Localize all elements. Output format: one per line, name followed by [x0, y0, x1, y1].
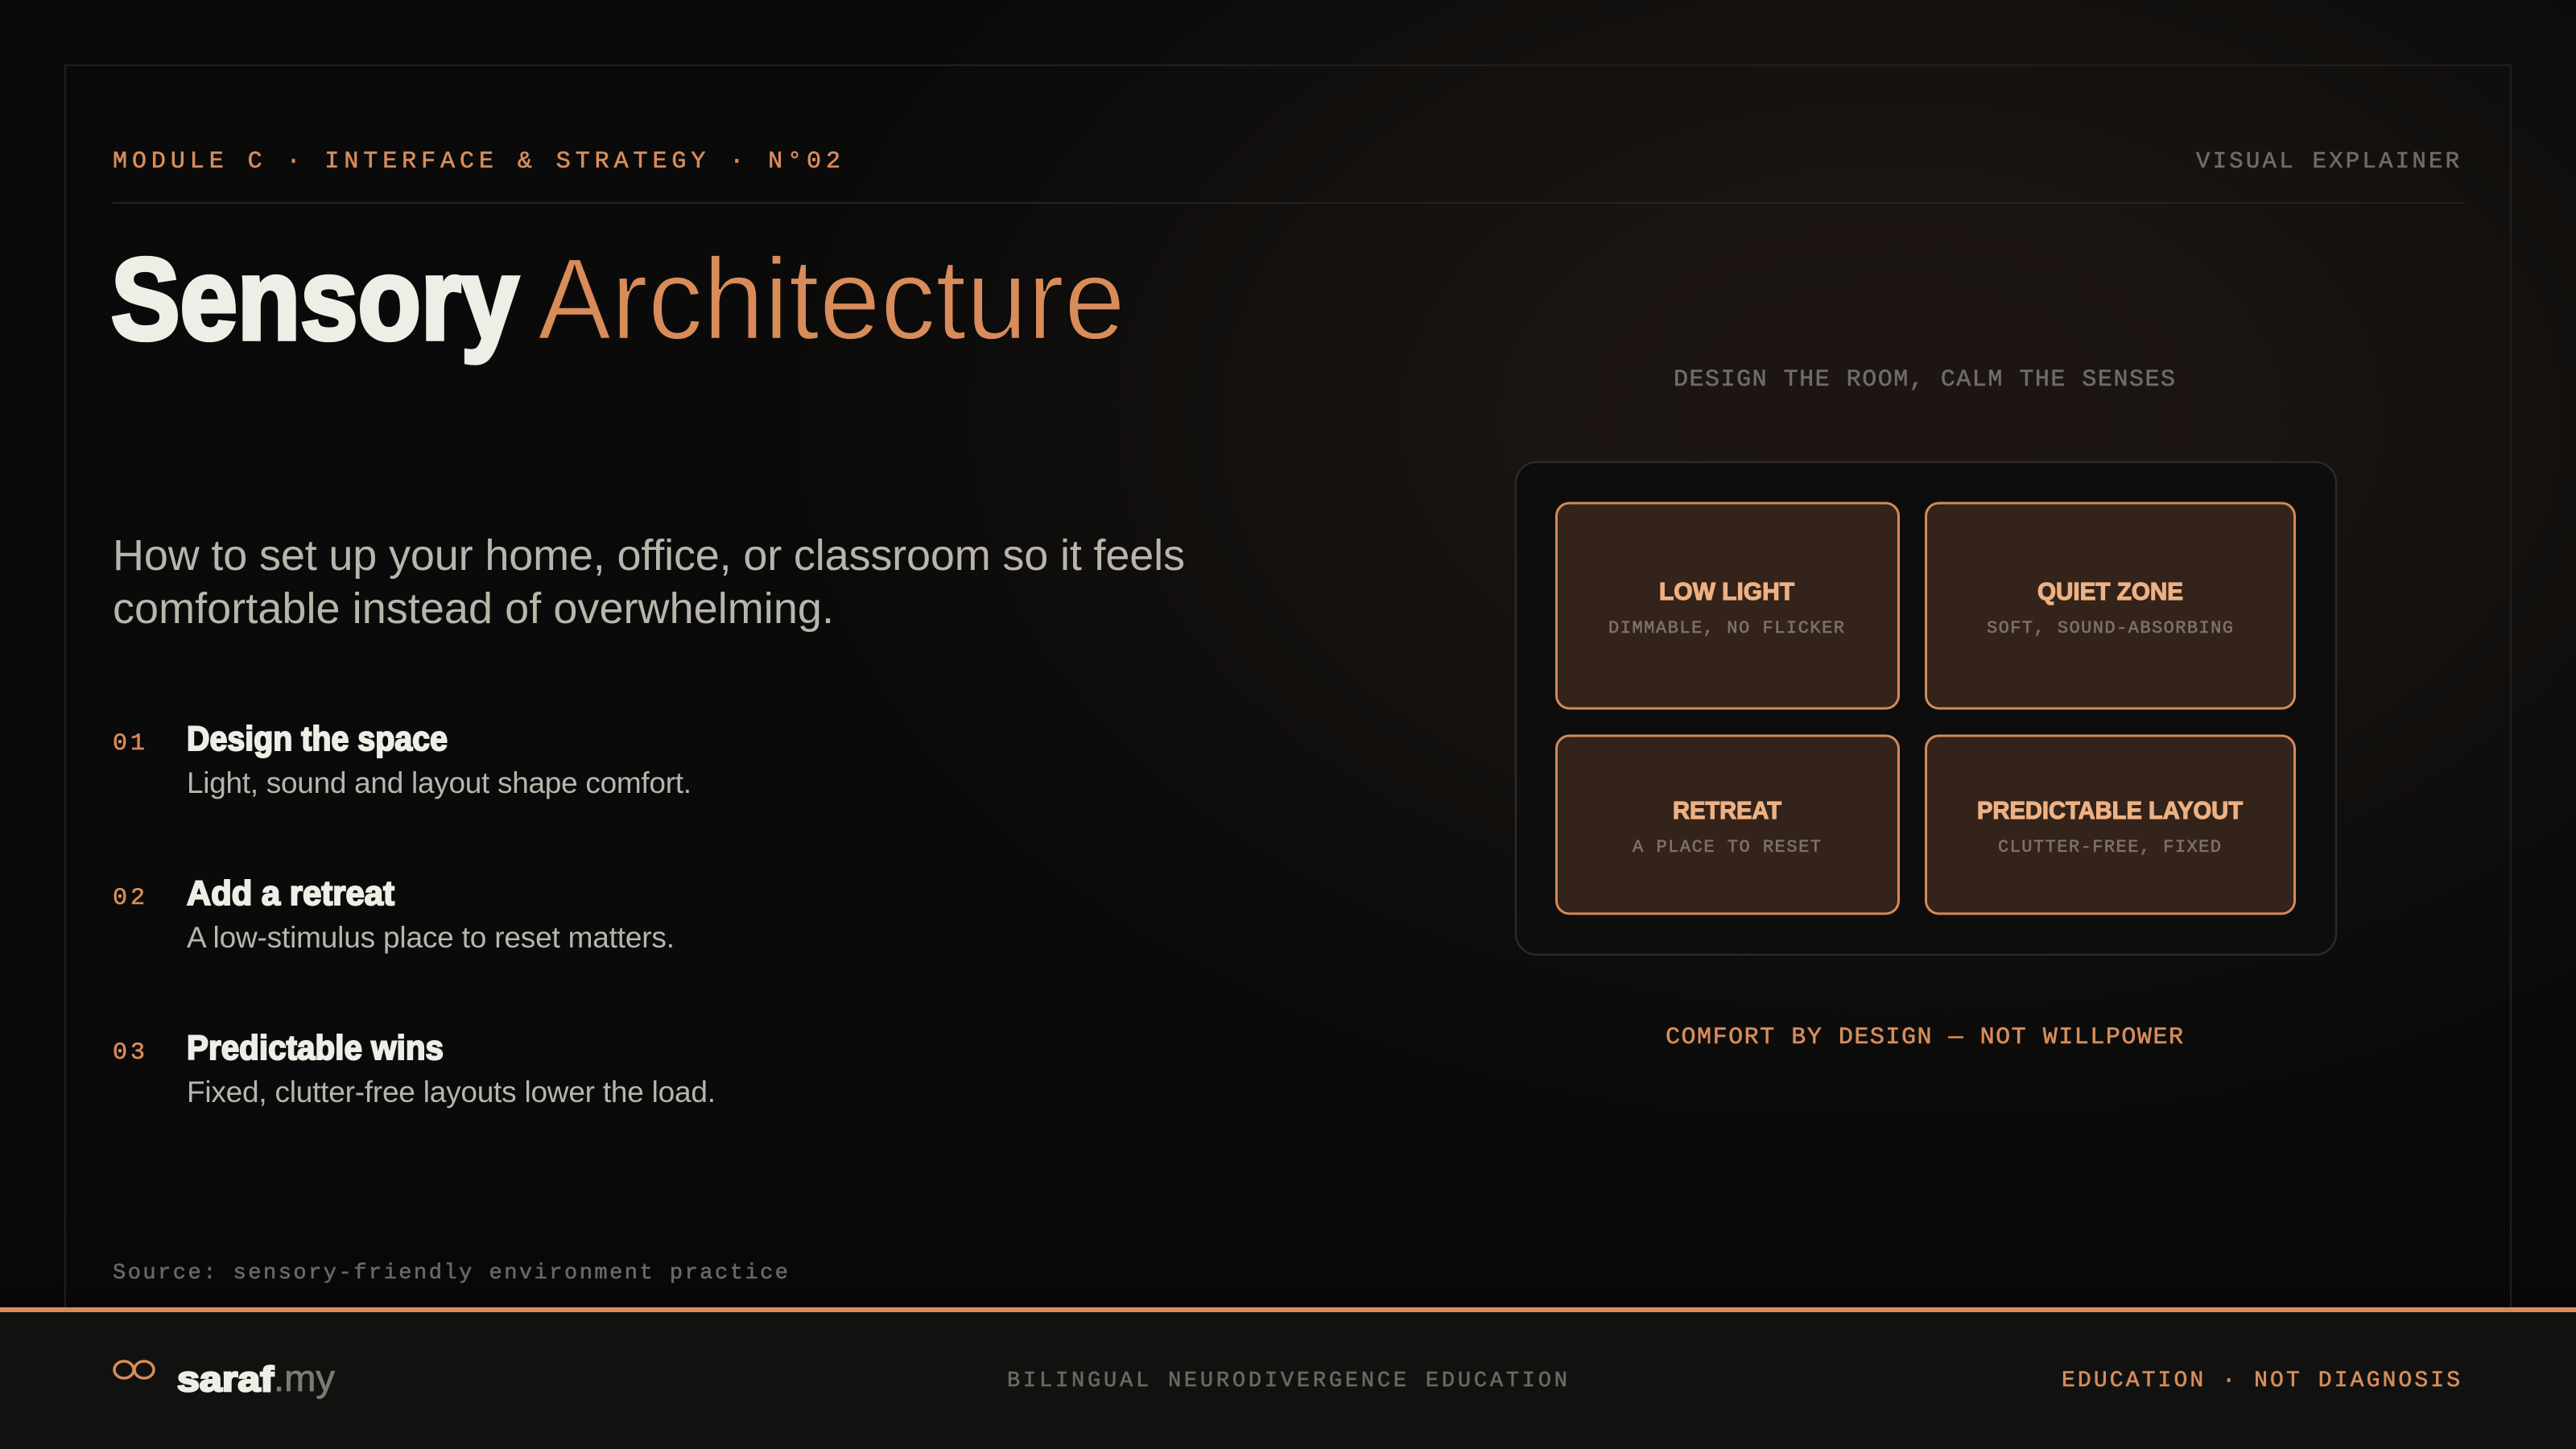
list item 02: A low-stimulus place to reset matters. [187, 921, 675, 954]
list item 03: Fixed, clutter-free layouts lower the load. [187, 1075, 716, 1108]
title: Architecture [538, 234, 1125, 364]
title [111, 234, 1125, 364]
header eyebrow: MODULE C · INTERFACE & STRATEGY · N°02 [113, 148, 840, 175]
subtitle [113, 531, 1185, 633]
card: low light [1557, 503, 1898, 708]
list item 03 [113, 1029, 716, 1108]
brand wordmark: .my [274, 1357, 335, 1399]
footer bar [0, 1307, 2576, 1449]
card: quiet zone: SOFT, SOUND-ABSORBING [1987, 618, 2233, 638]
card: retreat [1557, 736, 1898, 914]
header label: VISUAL EXPLAINER [2196, 148, 2459, 175]
diagram takeaway: COMFORT BY DESIGN — NOT WILLPOWER [1666, 1024, 2183, 1051]
brand wordmark: saraf [177, 1360, 274, 1399]
card: low light: LOW LIGHT [1659, 577, 1794, 605]
diagram caption: DESIGN THE ROOM, CALM THE SENSES [1674, 366, 2175, 394]
title: Sensory [111, 234, 518, 364]
source note: Source: sensory-friendly environment practice [113, 1261, 788, 1286]
list item 01 [113, 720, 691, 799]
card: predictable layout: PREDICTABLE LAYOUT [1977, 796, 2243, 824]
icon: infinity logo [114, 1361, 154, 1378]
subtitle: How to set up your home, office, or classroom so it feels [113, 531, 1185, 580]
list item 02: Add a retreat [187, 874, 394, 913]
card: predictable layout [1926, 736, 2294, 914]
footer right label: EDUCATION · NOT DIAGNOSIS [2062, 1368, 2460, 1393]
list item 03: 03 [113, 1039, 145, 1067]
list item 03: Predictable wins [187, 1029, 444, 1067]
list item 02 [113, 874, 675, 954]
panel: room diagram [1516, 462, 2336, 955]
list item 01: Design the space [187, 720, 448, 758]
footer center label: BILINGUAL NEURODIVERGENCE EDUCATION [1007, 1369, 1567, 1393]
brand wordmark [177, 1357, 335, 1399]
subtitle: comfortable instead of overwhelming. [113, 584, 834, 633]
list item 02: 02 [113, 885, 145, 912]
list item 01: Light, sound and layout shape comfort. [187, 766, 691, 799]
card: quiet zone [1926, 503, 2294, 708]
card: quiet zone: QUIET ZONE [2037, 577, 2183, 605]
list item 01: 01 [113, 730, 145, 758]
card: retreat: A PLACE TO RESET [1633, 837, 1821, 857]
card: retreat: RETREAT [1673, 796, 1781, 824]
card: predictable layout: CLUTTER-FREE, FIXED [1998, 837, 2221, 857]
card: low light: DIMMABLE, NO FLICKER [1608, 618, 1844, 638]
